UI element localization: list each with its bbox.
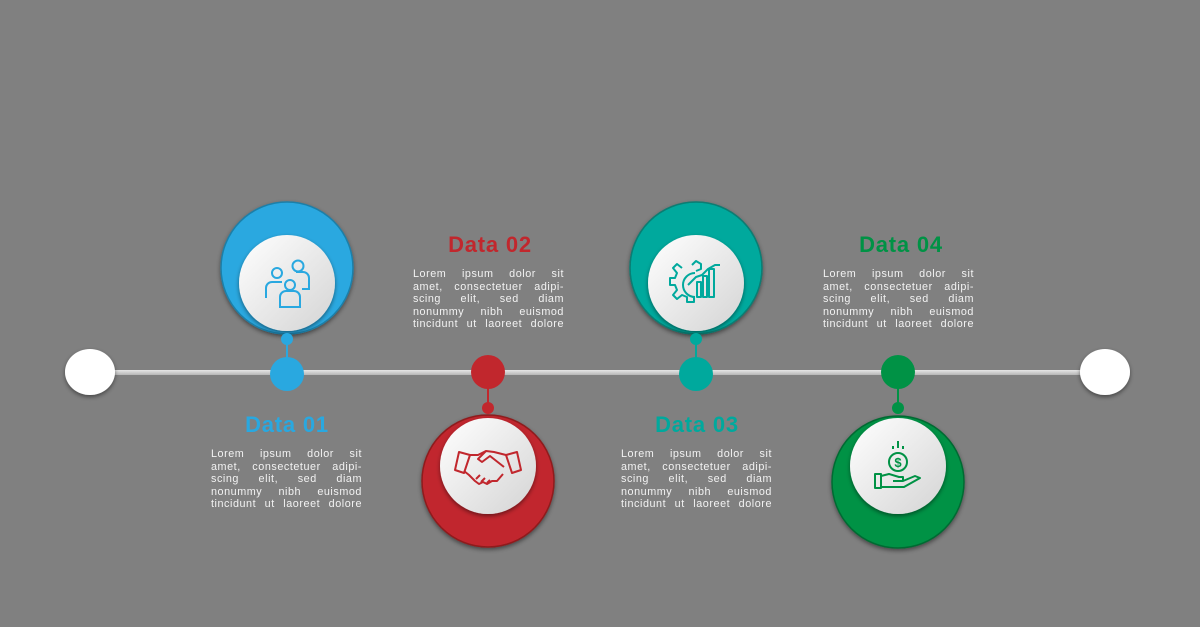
text: Data 03 [621, 448, 772, 510]
text: Data 03: Lorem ipsum dolor sit [621, 448, 772, 460]
step 3 teal circle with gear chart icon [630, 202, 762, 391]
text: Data 04: scing elit, sed diam [823, 293, 974, 305]
text: Data 02: nonummy nibh euismod [413, 306, 564, 318]
text: Data 02: scing elit, sed diam [413, 293, 564, 305]
text: Data 01: scing elit, sed diam [211, 473, 362, 485]
text: Data 01 [211, 448, 362, 510]
step 2 red circle with handshake icon [422, 355, 554, 547]
text: Data 02: tincidunt ut laoreet dolore [413, 318, 564, 330]
text: Data 03: tincidunt ut laoreet dolore [621, 498, 772, 510]
left end cap [65, 349, 115, 395]
text: Data 04 [823, 268, 974, 330]
text: Data 03: amet, consectetuer adipi- [621, 461, 772, 473]
heading: Data 03: Data 03 [655, 412, 739, 437]
text: Data 01: Lorem ipsum dolor sit [211, 448, 362, 460]
text: Data 03: scing elit, sed diam [621, 473, 772, 485]
text: Data 04: nonummy nibh euismod [823, 306, 974, 318]
text: Data 01: amet, consectetuer adipi- [211, 461, 362, 473]
heading: Data 02: Data 02 [448, 232, 532, 257]
heading: Data 01: Data 01 [245, 412, 329, 437]
step 4 green circle with money hand icon: $ [894, 455, 902, 470]
text: Data 03: nonummy nibh euismod [621, 486, 772, 498]
text: Data 02: amet, consectetuer adipi- [413, 281, 564, 293]
text: Data 02: Lorem ipsum dolor sit [413, 268, 564, 280]
text: Data 04: amet, consectetuer adipi- [823, 281, 974, 293]
text: Data 01: tincidunt ut laoreet dolore [211, 498, 362, 510]
text: Data 04: Lorem ipsum dolor sit [823, 268, 974, 280]
text: Data 01: nonummy nibh euismod [211, 486, 362, 498]
step 1 blue circle with people icon [221, 202, 353, 391]
heading: Data 04: Data 04 [859, 232, 943, 257]
timeline line [90, 370, 1105, 375]
text: Data 02 [413, 268, 564, 330]
right end cap [1080, 349, 1130, 395]
text: Data 04: tincidunt ut laoreet dolore [823, 318, 974, 330]
step 4 green circle with money hand icon [832, 355, 964, 548]
